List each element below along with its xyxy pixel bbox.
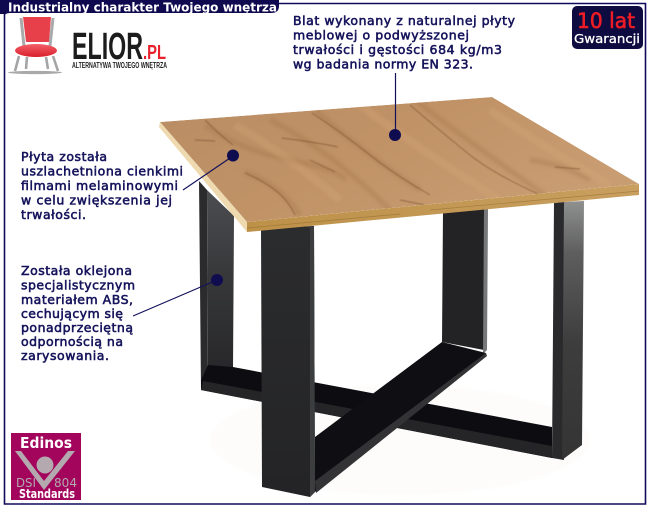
pointer line and dot bbox=[133, 274, 223, 316]
header title: Industrialny charakter Twojego wnętrza bbox=[8, 0, 277, 14]
callout text: specjalistycznym bbox=[21, 278, 135, 292]
header tab bbox=[0, 0, 279, 18]
callout text: materiałem ABS, bbox=[21, 292, 133, 307]
badge: 10 lat warranty bbox=[572, 6, 643, 49]
badge: Edinos standards: Edinos bbox=[20, 434, 72, 452]
tabletop edge bbox=[159, 122, 639, 232]
callout text: Została oklejona bbox=[21, 263, 132, 278]
callout text: odpornością na bbox=[21, 334, 123, 349]
back leg bbox=[442, 209, 488, 354]
callout: ABS material bbox=[21, 263, 223, 363]
callout text: cechującym się bbox=[21, 306, 123, 321]
icon: red chair bbox=[8, 17, 62, 74]
callout text: wg badania normy EN 323. bbox=[293, 56, 473, 72]
badge: Edinos standards bbox=[11, 433, 81, 501]
wordmark: ELIOR bbox=[72, 26, 143, 68]
wordmark suffix: .PL bbox=[143, 42, 166, 64]
right leg bbox=[552, 201, 584, 460]
crossbar: back to front bbox=[315, 342, 487, 493]
badge: Edinos standards: DSI bbox=[16, 476, 36, 490]
tagline: ALTERNATYWA TWOJEGO WNĘTRZA bbox=[72, 61, 167, 70]
badge: 10 lat warranty: Gwarancji bbox=[574, 32, 640, 46]
callout text: zarysowania. bbox=[21, 348, 109, 363]
callout text bbox=[21, 263, 135, 363]
callout: tabletop board bbox=[293, 13, 516, 141]
callout text: w celu zwiększenia jej bbox=[21, 192, 172, 208]
table illustration bbox=[159, 97, 639, 497]
callout text: ponadprzeciętną bbox=[21, 320, 133, 335]
left leg bbox=[199, 181, 234, 390]
badge: 10 lat warranty: 10 lat bbox=[577, 9, 635, 33]
pointer line and dot bbox=[389, 73, 401, 141]
callout text: meblowej o podwyższonej bbox=[293, 28, 469, 42]
callout text bbox=[21, 149, 183, 222]
front leg bbox=[261, 226, 315, 497]
callout text: trwałości i gęstości 684 kg/m3 bbox=[293, 42, 502, 57]
callout text: Blat wykonany z naturalnej płyty bbox=[293, 13, 516, 28]
callout text bbox=[293, 13, 516, 72]
callout text: filmami melaminowymi bbox=[21, 178, 178, 193]
callout text: trwałości. bbox=[21, 207, 86, 222]
badge: Edinos standards: 804 bbox=[54, 476, 77, 490]
floor shadow bbox=[210, 385, 590, 495]
logo: Elior bbox=[8, 17, 167, 74]
pointer line and dot bbox=[183, 150, 239, 190]
crossbar: left to right bbox=[201, 365, 552, 458]
callout: melamine films bbox=[21, 149, 239, 222]
callout text: uszlachetniona cienkimi bbox=[21, 164, 183, 178]
badge: Edinos standards: Standards bbox=[19, 487, 75, 501]
callout text: Płyta została bbox=[21, 149, 107, 164]
tabletop surface bbox=[160, 97, 639, 222]
